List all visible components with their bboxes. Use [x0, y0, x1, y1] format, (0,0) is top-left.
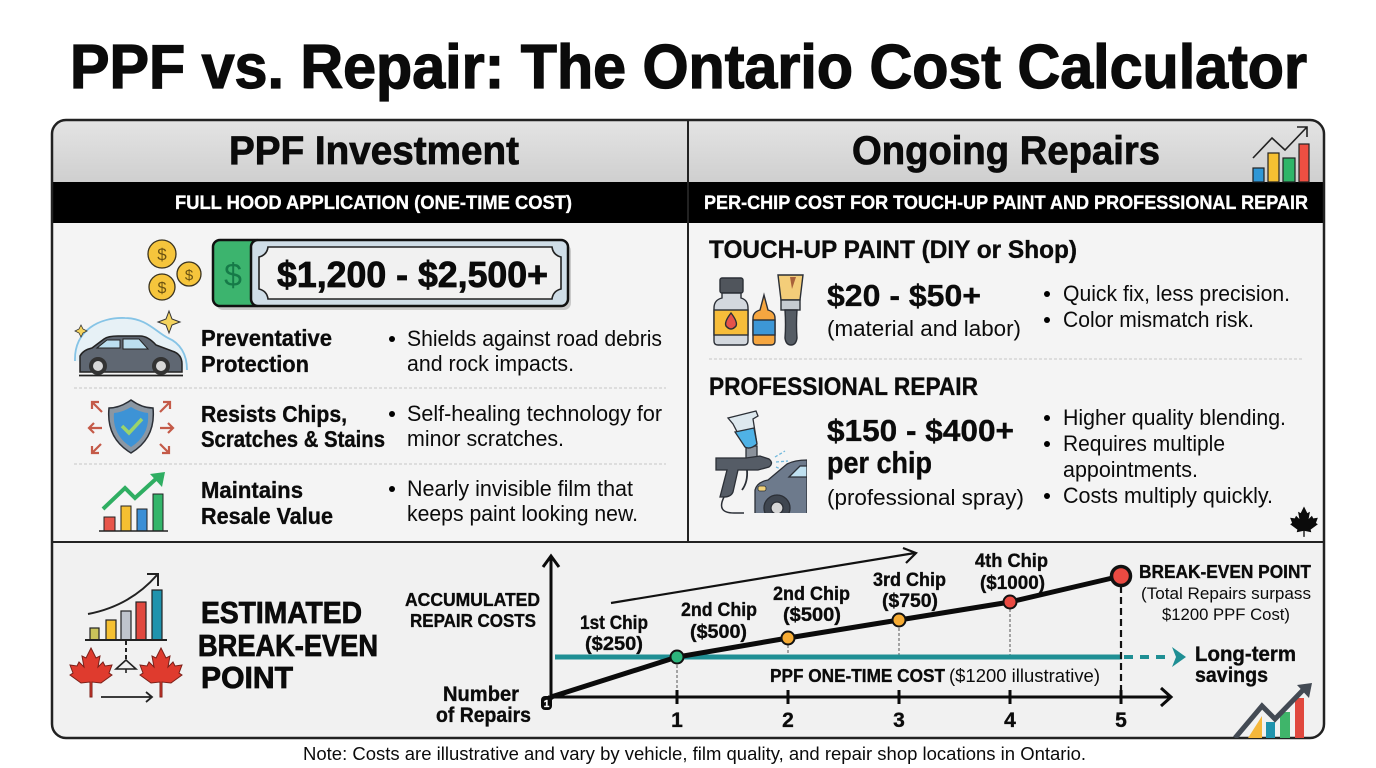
text: touch-up bullets: Color mismatch risk.	[1063, 307, 1254, 332]
chip labels: ($750)	[882, 590, 938, 612]
text: Resists Chips	[201, 401, 385, 452]
price ticket: $1,200 - $2,500+	[277, 254, 548, 295]
axis label: number of repairs: of Repairs	[436, 704, 531, 727]
text: self-healing bullet: minor scratches.	[407, 426, 564, 451]
text: Maintains Resale Value: Resale Value	[201, 503, 333, 529]
axes	[543, 556, 1171, 706]
text: Preventative Protection	[201, 325, 332, 377]
label: long-term savings	[1195, 643, 1296, 687]
chip labels: ($500)	[690, 621, 747, 643]
icon: protected car	[75, 311, 187, 376]
chip labels	[580, 550, 1048, 655]
x-axis numbers: 3	[893, 709, 905, 732]
icon: coins: $	[185, 267, 194, 284]
origin badge: 1	[544, 699, 550, 710]
text: professional price: per chip	[827, 445, 932, 480]
text: professional bullets: appointments.	[1063, 457, 1198, 482]
chip labels: 2nd Chip	[681, 599, 757, 621]
chip labels: 3rd Chip	[873, 569, 946, 591]
heading: estimated break-even point: BREAK-EVEN	[198, 628, 378, 663]
text: touch-up price	[827, 278, 1021, 341]
callout: break-even point: BREAK-EVEN POINT	[1139, 562, 1311, 582]
title: PPF vs. Repair: The Ontario Cost Calculator	[70, 33, 1307, 102]
text: professional bullets: Higher quality blending.	[1063, 405, 1286, 430]
heading: professional repair: PROFESSIONAL REPAIR	[709, 373, 978, 401]
repair cost line	[551, 576, 1121, 697]
chip labels: ($1000)	[980, 572, 1045, 594]
footnote: Note: Costs are illustrative and vary by vehicle, film quality, and repair shop locations in Ontario.	[303, 744, 1086, 764]
text: professional price	[827, 413, 1024, 510]
x-axis numbers: 1	[671, 709, 683, 732]
text: shields bullet: and rock impacts.	[407, 351, 574, 376]
text: Maintains Resale Value: Maintains	[201, 477, 303, 503]
text: professional bullets: Requires multiple	[1063, 431, 1225, 456]
text: Preventative Protection: Protection	[201, 351, 309, 377]
x-axis numbers	[671, 709, 1127, 732]
text: shields bullet	[389, 326, 662, 376]
icon: coins: $	[157, 245, 167, 264]
teal PPF cost line	[555, 647, 1186, 667]
icon: corner growth chart	[1235, 683, 1312, 738]
x-axis numbers: 2	[782, 709, 794, 732]
chip labels: 4th Chip	[975, 550, 1048, 572]
text: touch-up bullets	[1044, 281, 1290, 332]
icon: break-even chart with maple leaves	[70, 574, 182, 702]
text: shields bullet: Shields against road debris	[407, 326, 662, 351]
chip labels: ($250)	[585, 633, 643, 655]
icon: black maple leaf	[1290, 506, 1318, 537]
text: touch-up price: (material and labor)	[827, 316, 1021, 341]
heading: Ongoing Repairs: Ongoing Repairs	[852, 129, 1160, 173]
chip labels: 2nd Chip	[773, 583, 850, 605]
panel: main card	[52, 120, 1324, 738]
text: Resists Chips: Scratches & Stains	[201, 426, 385, 452]
x-axis numbers: 4	[1004, 709, 1016, 732]
subheading band: left: FULL HOOD APPLICATION (ONE-TIME COST)	[175, 193, 572, 214]
icon: rising bar chart in header	[1253, 127, 1309, 182]
heading: estimated break-even point: ESTIMATED	[201, 595, 362, 630]
icon: spray gun and car	[716, 411, 807, 521]
icon: coins: $	[158, 280, 167, 297]
text: invisible film bullet: keeps paint looking new.	[407, 501, 638, 526]
label: PPF one-time cost: ($1200 illustrative)	[949, 666, 1100, 686]
price ticket: $	[224, 257, 242, 293]
price ticket	[213, 240, 571, 310]
chip labels: 1st Chip	[580, 612, 648, 634]
callout: break-even point	[1139, 562, 1311, 624]
heading: touch-up paint: TOUCH-UP PAINT (DIY or Shop)	[709, 236, 1077, 264]
axis label: accumulated repair costs: ACCUMULATED	[405, 589, 540, 610]
trend arrow	[611, 548, 916, 603]
heading: estimated break-even point	[198, 595, 378, 695]
icon: paint bottles and brush	[714, 275, 803, 345]
dashed break-even drop	[1120, 586, 1122, 690]
heading: estimated break-even point: POINT	[201, 660, 293, 695]
text: touch-up price: $20 - $50+	[827, 278, 981, 313]
heading: PPF Investment: PPF Investment	[229, 129, 519, 173]
axis label: number of repairs: Number	[443, 683, 519, 706]
chip labels: ($500)	[783, 604, 841, 626]
label: PPF one-time cost	[770, 666, 1100, 686]
text: invisible film bullet: Nearly invisible film that	[407, 476, 633, 501]
axis label: number of repairs	[436, 683, 531, 727]
text: self-healing bullet: Self-healing technology for	[407, 401, 662, 426]
text: professional bullets	[1044, 405, 1286, 508]
x-axis numbers: 5	[1115, 709, 1127, 732]
text: professional price: $150 - $400+	[827, 413, 1014, 448]
label: long-term savings: savings	[1195, 664, 1268, 687]
icon: coins	[148, 240, 201, 300]
text: self-healing bullet	[389, 401, 662, 451]
label: long-term savings: Long-term	[1195, 643, 1296, 666]
subheading band: right: PER-CHIP COST FOR TOUCH-UP PAINT AND PROFESSIONAL REPAIR	[704, 193, 1308, 214]
text: professional price: (professional spray)	[827, 485, 1024, 510]
text: Preventative Protection: Preventative	[201, 325, 332, 351]
text: touch-up bullets: Quick fix, less precision.	[1063, 281, 1290, 306]
data points	[670, 566, 1130, 664]
icon: shield	[89, 400, 173, 453]
origin badge	[541, 696, 552, 710]
text: professional bullets: Costs multiply quickly.	[1063, 483, 1273, 508]
callout: break-even point: $1200 PPF Cost)	[1162, 605, 1290, 624]
icon: resale chart	[99, 472, 168, 531]
line chart: break-even	[541, 548, 1186, 710]
text: Resists Chips: Resists Chips,	[201, 401, 347, 427]
axis label: accumulated repair costs	[405, 589, 540, 631]
label: PPF one-time cost: PPF ONE-TIME COST	[770, 666, 945, 686]
axis label: accumulated repair costs: REPAIR COSTS	[410, 610, 536, 631]
text: invisible film bullet	[389, 476, 638, 526]
callout: break-even point: (Total Repairs surpass	[1141, 584, 1311, 603]
text: Maintains Resale Value	[201, 477, 333, 529]
